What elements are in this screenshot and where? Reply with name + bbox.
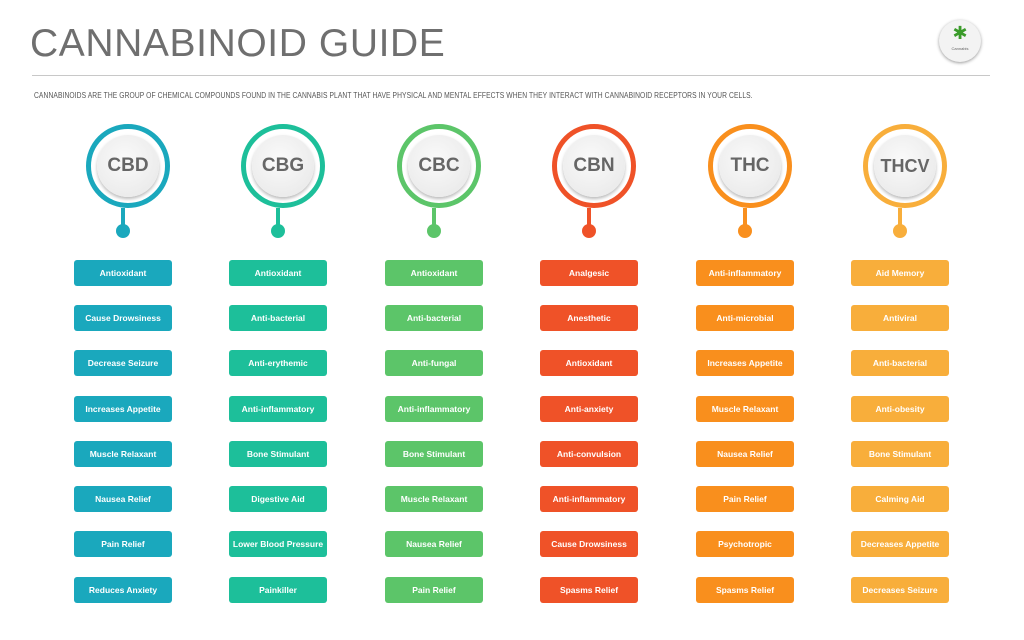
text: Spasms Relief [716,585,774,595]
text: Anesthetic [567,313,611,323]
text: Bone Stimulant [869,449,931,459]
text: Anti-fungal [412,358,456,368]
panel: CBD [74,124,172,603]
text: Antioxidant [411,268,457,278]
text: Decreases Appetite [861,539,939,549]
text: Spasms Relief [560,585,618,595]
text: Increases Appetite [85,404,161,414]
text: CBN [573,155,615,176]
panel: THCV [851,124,949,603]
text: Increases Appetite [707,358,783,368]
text: Nausea Relief [717,449,773,459]
panel: CBC [385,124,483,603]
text: THC [730,155,770,176]
icon: cannabis logo: ✱ [952,23,968,43]
text: Antioxidant [100,268,146,278]
text: Anti-microbial [716,313,774,323]
title: CANNABINOID GUIDE [30,22,445,65]
text: Anti-inflammatory [553,494,625,504]
text: Muscle Relaxant [712,404,778,414]
text: Cause Drowsiness [85,313,161,323]
text: Lower Blood Pressure [233,539,323,549]
subtitle text: CANNABINOIDS ARE THE GROUP OF CHEMICAL COMPOUNDS FOUND IN THE CANNABIS PLANT THAT HAVE PHYSICAL AND MENTAL EFFECTS WHEN THEY INTERACT WITH CANNABINOID RECEPTORS IN YOUR CELLS. [34,91,753,100]
text: Nausea Relief [95,494,151,504]
text: Anti-inflammatory [242,404,314,414]
text: Antioxidant [255,268,301,278]
text: Nausea Relief [406,539,462,549]
icon: cannabis logo: Cannabis [952,46,968,51]
text: Decreases Seizure [862,585,938,595]
text: Painkiller [259,585,297,595]
text: Anti-inflammatory [709,268,781,278]
text: THCV [880,156,930,176]
text: Aid Memory [876,268,924,278]
text: Anti-inflammatory [398,404,470,414]
panel: CBN [540,124,638,603]
text: Muscle Relaxant [90,449,156,459]
text: Bone Stimulant [403,449,465,459]
text: CBD [107,155,149,176]
text: Anti-bacterial [407,313,461,323]
text: Anti-convulsion [557,449,621,459]
text: Anti-bacterial [251,313,305,323]
text: Analgesic [569,268,609,278]
text: Anti-obesity [875,404,925,414]
text: CBG [262,155,304,176]
text: Decrease Seizure [88,358,158,368]
text: Antioxidant [566,358,612,368]
panel: CBG [229,124,327,603]
panel: THC [696,124,794,603]
text: Muscle Relaxant [401,494,467,504]
text: Calming Aid [875,494,925,504]
text: Anti-bacterial [873,358,927,368]
text: Psychotropic [718,539,772,549]
text: Cause Drowsiness [551,539,627,549]
text: Pain Relief [101,539,145,549]
text: Pain Relief [723,494,767,504]
text: Anti-anxiety [565,404,613,414]
text: CBC [418,155,460,176]
text: Pain Relief [412,585,456,595]
icon: cannabis logo [939,20,981,62]
text: Reduces Anxiety [89,585,157,595]
text: Digestive Aid [251,494,305,504]
text: Anti-erythemic [248,358,308,368]
text: Antiviral [883,313,917,323]
text: Bone Stimulant [247,449,309,459]
